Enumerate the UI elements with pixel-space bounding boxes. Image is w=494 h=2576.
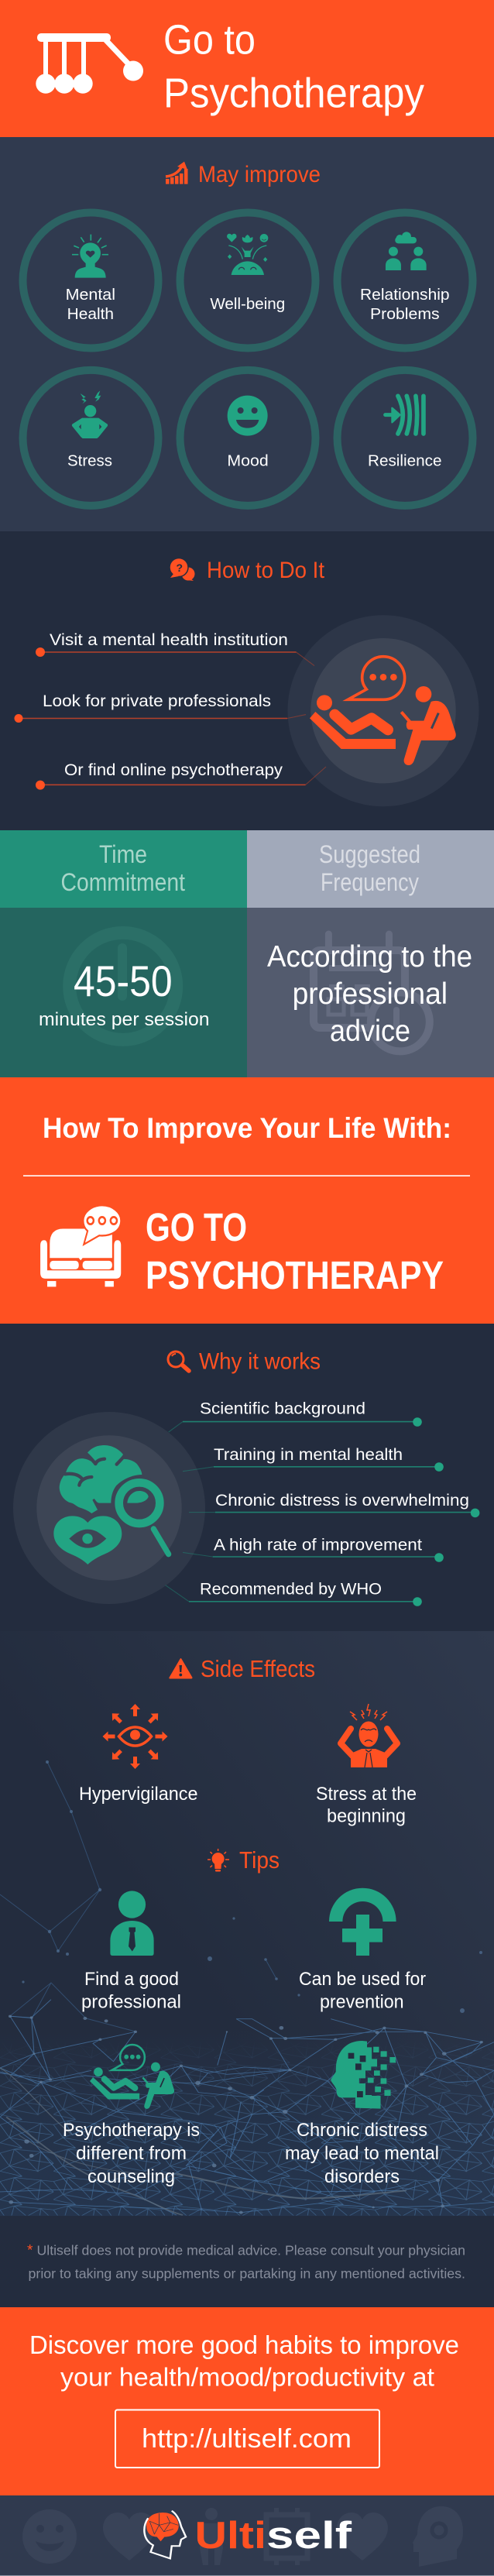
callout: recommended by who xyxy=(166,1581,422,1606)
label: psychotherapy is different from counseling: counseling xyxy=(87,2166,175,2187)
ghost footer icons xyxy=(22,2506,463,2567)
panel: how to improve banner xyxy=(0,1077,494,1324)
panel: may improve xyxy=(0,137,494,531)
callout: look for private professionals xyxy=(14,692,306,723)
disclaimer text: prior to taking any supplements or partaking in any mentioned activities. xyxy=(28,2266,465,2282)
call to action text xyxy=(29,2330,459,2392)
icon: prevention umbrella cross xyxy=(329,1888,396,1956)
banner heading: How To Improve Your Life With: xyxy=(43,1112,451,1144)
icon: stress xyxy=(72,390,108,438)
label: find a good professional: Find a good xyxy=(84,1969,179,1990)
callout: scientific background xyxy=(169,1400,422,1432)
callout: training in mental health: Training in mental health xyxy=(214,1446,403,1464)
panel: disclaimer xyxy=(0,2216,494,2307)
label: psychotherapy is different from counseling: different from xyxy=(76,2143,187,2164)
callout: visit a mental health institution xyxy=(36,631,314,666)
icon: newton's cradle xyxy=(36,33,143,94)
callout: look for private professionals: Look for private professionals xyxy=(43,692,271,710)
label: can be used for prevention: prevention xyxy=(320,1992,404,2012)
panel: how to do it xyxy=(0,531,494,830)
call to action text: Discover more good habits to improve xyxy=(29,2330,459,2359)
title xyxy=(163,17,424,116)
disclaimer text: * xyxy=(27,2243,33,2258)
icon: question bubbles: ? xyxy=(177,562,183,574)
panel: side effects and tips xyxy=(0,1631,494,2216)
text: according to the professional advice: professional xyxy=(293,977,448,1011)
text: according to the professional advice: advice xyxy=(330,1015,410,1048)
callout: training in mental health xyxy=(183,1446,444,1472)
icon: brain heart and magnifier xyxy=(53,1445,169,1564)
heading: suggested frequency: Frequency xyxy=(321,868,419,896)
url button: http://ultiself.com xyxy=(142,2424,352,2454)
heading: time commitment: Commitment xyxy=(60,868,185,896)
label: stress at the beginning xyxy=(316,1784,417,1827)
network mesh xyxy=(0,2000,494,2216)
icon: light bulb xyxy=(208,1849,229,1871)
text: according to the professional advice: According to the xyxy=(267,940,472,974)
callout: or find online psychotherapy xyxy=(36,761,326,790)
icon: therapy session teal xyxy=(90,2045,174,2109)
heading: why it works: Why it works xyxy=(199,1349,321,1374)
label: chronic distress may lead to mental disorders xyxy=(285,2120,439,2187)
disclaimer text xyxy=(27,2243,465,2282)
text: according to the professional advice xyxy=(267,940,472,1048)
label: chronic distress may lead to mental disorders: disorders xyxy=(324,2166,400,2187)
label: psychotherapy is different from counseling xyxy=(63,2120,200,2187)
icon: dissolving head xyxy=(331,2041,396,2109)
label: find a good professional xyxy=(81,1969,181,2012)
heading: how to do it: How to Do It xyxy=(207,558,325,583)
label: relationship problems xyxy=(360,286,450,323)
callout: a high rate of improvement xyxy=(183,1537,444,1562)
heading: may improve: May improve xyxy=(198,162,321,187)
label: can be used for prevention xyxy=(299,1969,426,2012)
heading: suggested frequency: Suggested xyxy=(319,840,420,868)
icon: mood xyxy=(228,396,268,436)
network background xyxy=(0,1760,494,2216)
icon: eye with arrows xyxy=(102,1704,167,1769)
icon: relationship xyxy=(386,232,427,270)
url button xyxy=(115,2410,379,2468)
label: stress at the beginning: Stress at the xyxy=(316,1784,417,1805)
label: resilience: Resilience xyxy=(368,452,441,469)
icon: resilience xyxy=(386,396,424,434)
banner title: GO TO xyxy=(146,1205,247,1249)
label: can be used for prevention: Can be used for xyxy=(299,1969,426,1990)
icon: question bubbles xyxy=(170,558,195,581)
label: mental health: Mental xyxy=(66,286,115,304)
header panel xyxy=(0,0,494,137)
stat: 45-50: 45-50 xyxy=(74,957,173,1005)
callout: a high rate of improvement: A high rate of improvement xyxy=(214,1537,422,1554)
icon: mental health xyxy=(72,235,108,278)
logo wordmark xyxy=(195,2515,352,2557)
call to action text: your health/mood/productivity at xyxy=(60,2362,434,2392)
callout: visit a mental health institution: Visit a mental health institution xyxy=(50,631,288,649)
disclaimer text: Ultiself does not provide medical advice. Please consult your physician xyxy=(37,2243,465,2258)
label: chronic distress may lead to mental disorders: Chronic distress xyxy=(297,2120,427,2141)
title: Go to xyxy=(163,17,256,64)
ghost calendar xyxy=(314,934,430,1051)
icon: professional person xyxy=(110,1891,154,1956)
banner title xyxy=(146,1205,444,1297)
stat label: minutes per session: minutes per session xyxy=(39,1009,210,1030)
brain circles xyxy=(13,1412,205,1604)
banner title: PSYCHOTHERAPY xyxy=(146,1253,444,1297)
label: mental health: Health xyxy=(67,305,114,323)
label: relationship problems: Problems xyxy=(370,305,440,323)
icon: warning triangle xyxy=(170,1659,192,1678)
logo: ultiself brain head xyxy=(144,2511,186,2558)
logo wordmark: self xyxy=(266,2515,352,2557)
label: relationship problems: Relationship xyxy=(360,286,450,304)
label: psychotherapy is different from counseling: Psychotherapy is xyxy=(63,2120,200,2141)
panel: suggested frequency xyxy=(247,830,494,1077)
icon: well-being xyxy=(227,234,268,275)
label: find a good professional: professional xyxy=(81,1992,181,2012)
benefit rings xyxy=(23,212,472,506)
label: mental health xyxy=(66,286,115,323)
callout: or find online psychotherapy: Or find online psychotherapy xyxy=(64,761,283,779)
logo wordmark: Ulti xyxy=(195,2515,266,2557)
ghost clock xyxy=(70,933,177,1039)
label: chronic distress may lead to mental disorders: may lead to mental xyxy=(285,2143,439,2164)
panel: why it works xyxy=(0,1324,494,1631)
heading: tips: Tips xyxy=(239,1846,280,1874)
label: stress: Stress xyxy=(67,452,112,469)
icon: magnifier xyxy=(168,1352,189,1371)
label: hypervigilance: Hypervigilance xyxy=(79,1784,198,1805)
label: stress at the beginning: beginning xyxy=(327,1806,406,1827)
callout: recommended by who: Recommended by WHO xyxy=(200,1581,382,1599)
icon: couch with speech bubble xyxy=(40,1205,121,1286)
callout: chronic distress is overwhelming xyxy=(189,1492,479,1517)
icon: rising chart xyxy=(166,162,187,184)
label: well-being: Well-being xyxy=(210,295,285,313)
icon: therapy session xyxy=(310,657,456,765)
panel: time commitment xyxy=(0,830,247,1077)
therapy circles xyxy=(288,615,479,806)
title: Psychotherapy xyxy=(163,70,424,116)
panel: footer xyxy=(0,2495,494,2576)
heading: suggested frequency xyxy=(319,840,420,896)
callout: chronic distress is overwhelming: Chronic distress is overwhelming xyxy=(215,1492,469,1510)
icon: stressed man xyxy=(341,1704,397,1767)
heading: time commitment xyxy=(60,840,185,896)
panel: call to action xyxy=(0,2307,494,2495)
heading: side effects: Side Effects xyxy=(201,1655,315,1682)
label: mood: Mood xyxy=(227,452,269,469)
callout: scientific background: Scientific background xyxy=(200,1400,365,1417)
heading: time commitment: Time xyxy=(99,840,147,868)
